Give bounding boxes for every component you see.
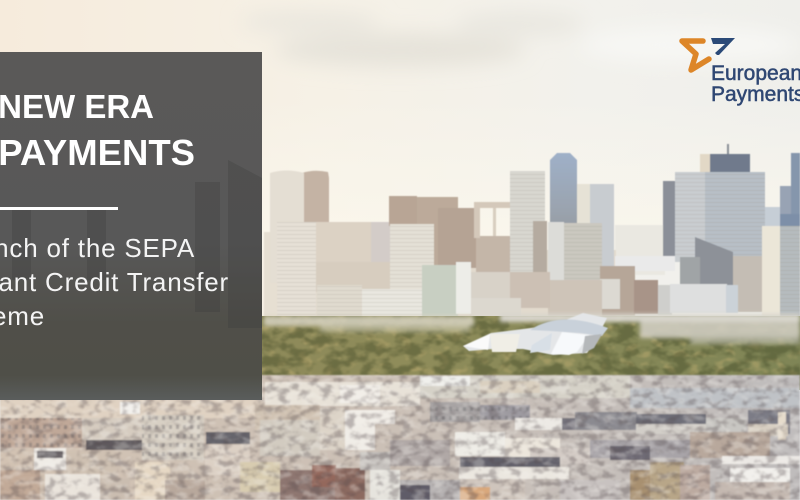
divider line (0, 207, 118, 210)
heading: A new era of payments (0, 88, 195, 173)
Haussmann rooftops (0, 375, 800, 500)
park tree band (0, 314, 800, 390)
logo wordmark (711, 62, 800, 106)
panel: translucent title box (0, 52, 262, 400)
ghost towers behind the panel (12, 160, 262, 328)
icon: navy arrow stroke (711, 38, 735, 55)
logo: European Payments (682, 38, 800, 106)
logo wordmark: European (711, 62, 800, 85)
subtitle: launch of the SEPA scheme (0, 233, 229, 331)
Fondation Louis Vuitton glass sails (463, 313, 608, 355)
icon: orange sigma mark (682, 41, 709, 70)
sky with clouds (0, 0, 800, 330)
skyscrapers of La Defense (264, 144, 800, 322)
